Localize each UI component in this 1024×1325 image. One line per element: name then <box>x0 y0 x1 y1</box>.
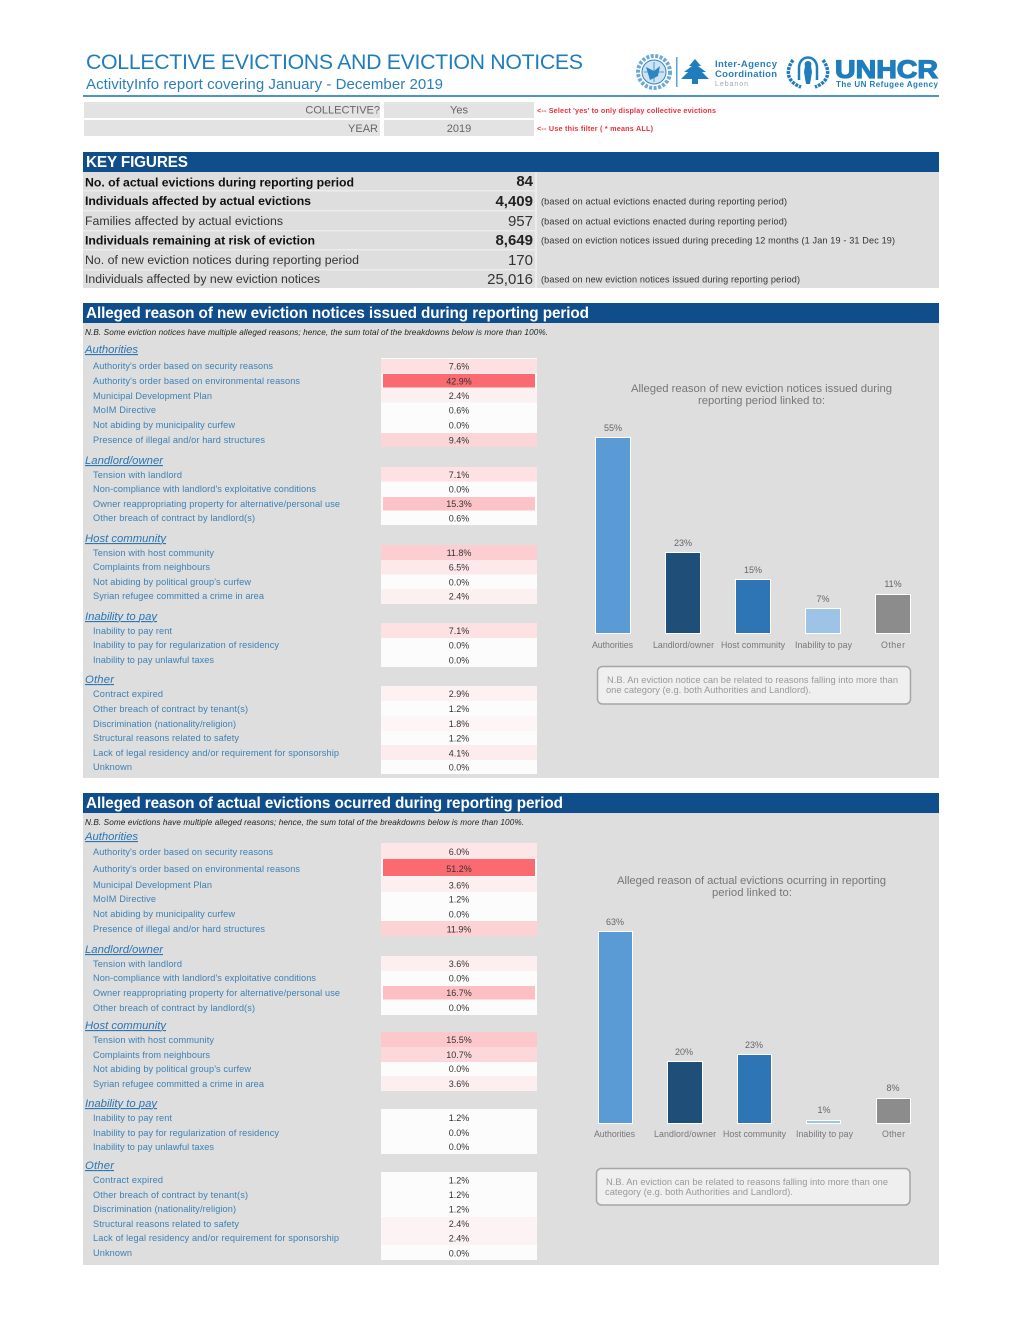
table: Host community: 0.0% <box>449 1064 469 1074</box>
section heading: Alleged reason of actual evictions ocurred during reporting period <box>86 795 563 812</box>
callout <box>596 1168 910 1205</box>
section heading: Alleged reason of new eviction notices issued during reporting period <box>86 305 589 322</box>
filters: 2019 <box>447 123 471 135</box>
table: Landlord/owner: Other breach of contract by landlord(s) <box>93 513 255 523</box>
filters: YEAR <box>348 123 378 135</box>
table: Landlord/owner: 7.1% <box>449 470 469 480</box>
table: Authorities: 11.9% <box>447 924 471 934</box>
table: Host community: Syrian refugee committed a crime in area <box>93 1079 265 1089</box>
table: Other: Structural reasons related to safety <box>93 1219 239 1229</box>
bar chart: new eviction notices: Authorities <box>592 640 634 650</box>
table: Inability to pay: 0.0% <box>449 1142 469 1152</box>
key figure: new notices: No. of new eviction notices during reporting period <box>85 253 359 267</box>
table: Other: 1.2% <box>449 1176 469 1186</box>
table: Authorities: MoIM Directive <box>93 894 156 904</box>
chart title <box>631 383 892 407</box>
table: Authorities: Presence of illegal and/or hard structures <box>93 435 265 445</box>
table: Inability to pay: Inability to pay rent <box>93 1113 172 1123</box>
table: Other: 4.1% <box>449 748 469 758</box>
table: Other: 2.4% <box>449 1234 469 1244</box>
table: Other: 1.8% <box>449 719 469 729</box>
heading: Inability to pay: Inability to pay <box>85 1098 158 1110</box>
bar chart: actual evictions: Inability to pay <box>796 1129 854 1139</box>
key figures heading <box>83 152 939 172</box>
table: Landlord/owner: Owner reappropriating property for alternative/personal use <box>93 499 340 509</box>
table: Other: Lack of legal residency and/or requirement for sponsorship <box>93 748 339 758</box>
bar chart: actual evictions: 23% <box>745 1040 763 1050</box>
callout: category (e.g. both Authorities and Landlord). <box>605 1187 793 1197</box>
table: Host community: Not abiding by political group's curfew <box>93 577 251 587</box>
bar chart: actual evictions: 20% <box>675 1047 693 1057</box>
bar chart: new eviction notices: 7% <box>816 594 830 604</box>
table: Authorities: Municipal Development Plan <box>93 391 212 401</box>
table: Inability to pay: Inability to pay for regularization of residency <box>93 1128 279 1138</box>
section heading <box>83 303 939 323</box>
bar chart: actual evictions: Other <box>882 1129 905 1139</box>
key figure: individuals affected: (based on actual evictions enacted during reporting period) <box>541 196 787 206</box>
subtitle: ActivityInfo report covering January - December 2019 <box>86 76 443 93</box>
chart title: period linked to: <box>712 887 792 899</box>
table: Landlord/owner <box>93 467 537 525</box>
heading: Landlord/owner: Landlord/owner <box>85 455 164 467</box>
table: Landlord/owner: Non-compliance with landlord's exploitative conditions <box>93 484 316 494</box>
heading: Landlord/owner: Landlord/owner <box>85 944 164 956</box>
table: Inability to pay: 0.0% <box>449 640 469 650</box>
table: Inability to pay: Inability to pay rent <box>93 626 172 636</box>
bar chart: new eviction notices <box>592 423 910 650</box>
table: Host community: 11.8% <box>447 548 471 558</box>
chart title <box>617 875 886 899</box>
note: N.B. Some evictions have multiple alleged reasons; hence, the sum total of the breakdowns below is more than 100%. <box>85 818 524 827</box>
table: Authorities: Municipal Development Plan <box>93 880 212 890</box>
table: Other: Other breach of contract by tenant(s) <box>93 1190 248 1200</box>
callout: N.B. An eviction can be related to reasons falling into more than one <box>606 1177 888 1187</box>
callout <box>598 666 910 704</box>
key figure row dividers <box>83 172 537 288</box>
bar chart: actual evictions: Authorities <box>594 1129 636 1139</box>
table: Authorities: 42.9% <box>446 376 472 386</box>
table: Host community: 0.0% <box>449 578 469 588</box>
bar chart: new eviction notices: Inability to pay <box>795 640 853 650</box>
heading: Other: Other <box>85 674 115 686</box>
table: Authorities: Authority's order based on environmental reasons <box>93 864 300 874</box>
key figures heading: KEY FIGURES <box>86 154 188 171</box>
table: Landlord/owner <box>93 956 537 1015</box>
table: Other: 1.2% <box>449 704 469 714</box>
key figure: actual evictions <box>85 173 534 190</box>
table: Inability to pay <box>93 623 537 667</box>
table: Other: Contract expired <box>93 689 163 699</box>
table: Landlord/owner: Other breach of contract by landlord(s) <box>93 1003 255 1013</box>
table: Other: 0.0% <box>449 1248 469 1258</box>
chart title: reporting period linked to: <box>698 395 825 407</box>
table: Authorities: 6.0% <box>449 847 469 857</box>
filters: Yes <box>450 104 468 116</box>
key figure: individuals affected: 4,409 <box>495 193 533 210</box>
key figure: remaining at risk: Individuals remaining at risk of eviction <box>85 234 315 248</box>
table: Authorities: 0.0% <box>449 910 469 920</box>
logo divider <box>676 57 678 87</box>
key figure: families affected <box>85 213 787 230</box>
table: Host community <box>93 545 537 604</box>
key figure: families affected: Families affected by actual evictions <box>85 214 283 228</box>
table: Host community: Complaints from neighbours <box>93 562 210 572</box>
bar chart: new eviction notices: Other <box>881 640 905 650</box>
table: Other: 1.2% <box>449 734 469 744</box>
heading: Authorities: Authorities <box>84 344 138 356</box>
key figure: new notices <box>85 252 533 269</box>
logo: Inter-Agency Coordination Lebanon: Coordination <box>715 69 777 80</box>
heading: Host community: Host community <box>85 1020 167 1032</box>
table: Landlord/owner: 0.6% <box>449 514 469 524</box>
note: N.B. Some eviction notices have multiple alleged reasons; hence, the sum total of the breakdowns below is more than 100%. <box>85 328 548 337</box>
key figure: individuals affected by notices: Individuals affected by new eviction notices <box>85 272 320 286</box>
table: Host community: Syrian refugee committed a crime in area <box>93 591 265 601</box>
key figure: individuals affected: Individuals affected by actual evictions <box>85 194 311 208</box>
table: Inability to pay: 0.0% <box>449 656 469 666</box>
table: Authorities: Presence of illegal and/or hard structures <box>93 924 265 934</box>
table: Landlord/owner: Tension with landlord <box>93 959 182 969</box>
table: Inability to pay <box>93 1109 537 1154</box>
key figure: actual evictions: No. of actual evictions during reporting period <box>85 176 354 190</box>
logo: Inter-Agency Coordination Lebanon <box>715 59 778 88</box>
filters: <-- Use this filter ( * means ALL) <box>537 124 654 133</box>
chart title: Alleged reason of new eviction notices issued during <box>631 383 892 395</box>
title: COLLECTIVE EVICTIONS AND EVICTION NOTICES <box>86 50 583 74</box>
table: Authorities <box>93 358 537 447</box>
bar chart: new eviction notices: 15% <box>744 565 762 575</box>
key figure: individuals affected by notices: 25,016 <box>487 271 533 288</box>
key figure: individuals affected by notices <box>85 271 800 288</box>
logo: Inter-Agency Coordination Lebanon: Inter-Agency <box>715 59 778 70</box>
table: Authorities: 3.6% <box>449 880 469 890</box>
table: Authorities <box>93 843 537 936</box>
table: Landlord/owner: 16.7% <box>446 988 472 998</box>
table: Landlord/owner: 0.0% <box>449 484 469 494</box>
table: Host community: Tension with host community <box>93 548 214 558</box>
table: Host community: 10.7% <box>446 1050 472 1060</box>
table: Inability to pay: Inability to pay for regularization of residency <box>93 640 279 650</box>
table: Other: 0.0% <box>449 762 469 772</box>
bar chart: new eviction notices: Landlord/owner <box>653 640 714 650</box>
callout: N.B. An eviction notice can be related to reasons falling into more than <box>607 675 898 685</box>
table: Other: 1.2% <box>449 1204 469 1214</box>
logo: cedar <box>681 59 709 84</box>
bar chart: actual evictions: 63% <box>606 917 624 927</box>
table: Host community <box>93 1032 537 1091</box>
panel: new eviction notices <box>83 303 939 778</box>
bar chart: new eviction notices: Host community <box>721 640 786 650</box>
table: Authorities: 51.2% <box>446 864 472 874</box>
chart title: Alleged reason of actual evictions ocurring in reporting <box>617 875 886 887</box>
table: Authorities: 9.4% <box>449 436 469 446</box>
table: Other: Discrimination (nationality/religion) <box>93 1204 236 1214</box>
table: Other: 2.9% <box>449 689 469 699</box>
table: Landlord/owner: Tension with landlord <box>93 470 182 480</box>
bar chart: new eviction notices: 11% <box>884 579 902 589</box>
table: Landlord/owner: 15.3% <box>446 499 472 509</box>
table: Authorities: Authority's order based on security reasons <box>93 361 273 371</box>
key figure: new notices: 170 <box>508 252 533 269</box>
table: Landlord/owner: Owner reappropriating property for alternative/personal use <box>93 988 340 998</box>
key figure: individuals affected by notices: (based on new eviction notices issued during reporting period) <box>541 274 800 284</box>
heading: Authorities: Authorities <box>84 831 138 843</box>
table: Authorities: Not abiding by municipality curfew <box>93 909 235 919</box>
key figure: individuals affected <box>85 193 787 210</box>
table: Host community: Not abiding by political group's curfew <box>93 1064 251 1074</box>
key figure: remaining at risk: 8,649 <box>495 232 533 249</box>
key figure: families affected: 957 <box>508 213 533 230</box>
key figure: remaining at risk <box>85 232 895 249</box>
filters: <-- Select 'yes' to only display collective evictions <box>537 106 716 115</box>
table: Authorities: 7.6% <box>449 362 469 372</box>
section heading <box>83 793 939 813</box>
table: Inability to pay: 7.1% <box>449 626 469 636</box>
table: Other: Lack of legal residency and/or requirement for sponsorship <box>93 1233 339 1243</box>
table: Inability to pay: 0.0% <box>449 1128 469 1138</box>
logo: UN emblem <box>638 56 670 88</box>
callout: one category (e.g. both Authorities and Landlord). <box>606 685 811 695</box>
table: Host community: Tension with host community <box>93 1035 214 1045</box>
table: Landlord/owner: 0.0% <box>449 974 469 984</box>
table: Host community: 2.4% <box>449 592 469 602</box>
table: Authorities: Not abiding by municipality curfew <box>93 420 235 430</box>
key figure: remaining at risk: (based on eviction notices issued during preceding 12 months (1 Jan 19 - 31 Dec 19) <box>541 236 895 246</box>
bar chart: new eviction notices: 55% <box>604 423 622 433</box>
bar chart: actual evictions: 1% <box>817 1105 831 1115</box>
table: Authorities: 1.2% <box>449 894 469 904</box>
table: Host community: 3.6% <box>449 1079 469 1089</box>
title rule <box>83 95 939 97</box>
heading: Other: Other <box>85 1160 115 1172</box>
table: Host community: Complaints from neighbours <box>93 1050 210 1060</box>
table: Authorities: 0.6% <box>449 406 469 416</box>
bar chart: actual evictions: Landlord/owner <box>654 1129 716 1139</box>
table: Other <box>93 1172 537 1260</box>
logo: UNHCR wordmark: UNHCR <box>835 56 938 84</box>
table: Landlord/owner: 0.0% <box>449 1003 469 1013</box>
table: Authorities: MoIM Directive <box>93 405 156 415</box>
heading: Host community: Host community <box>85 533 167 545</box>
table: Authorities: 0.0% <box>449 420 469 430</box>
table: Other: Structural reasons related to safety <box>93 733 239 743</box>
bar chart: actual evictions <box>594 917 910 1139</box>
table: Inability to pay: Inability to pay unlawful taxes <box>93 655 214 665</box>
table: Other: Contract expired <box>93 1175 163 1185</box>
table: Inability to pay: Inability to pay unlawful taxes <box>93 1142 214 1152</box>
table: Authorities: Authority's order based on environmental reasons <box>93 376 300 386</box>
table: Landlord/owner: 3.6% <box>449 959 469 969</box>
table: Authorities: Authority's order based on security reasons <box>93 847 273 857</box>
logo: UNHCR wordmark: The UN Refugee Agency <box>836 80 939 89</box>
table: Authorities: 2.4% <box>449 391 469 401</box>
table: Host community: 15.5% <box>446 1035 472 1045</box>
table: Host community: 6.5% <box>449 562 469 572</box>
key figure: families affected: (based on actual evictions enacted during reporting period) <box>541 216 787 226</box>
table: Other: Unknown <box>93 762 132 772</box>
filters: COLLECTIVE? <box>305 104 380 116</box>
panel: actual evictions <box>83 793 939 1265</box>
logo: UNHCR laurel emblem <box>788 58 828 87</box>
filters <box>84 102 716 136</box>
key figure: actual evictions: 84 <box>516 173 534 190</box>
bar chart: new eviction notices: 23% <box>674 538 692 548</box>
table: Other: 1.2% <box>449 1190 469 1200</box>
table: Landlord/owner: Non-compliance with landlord's exploitative conditions <box>93 973 316 983</box>
bar chart: actual evictions: Host community <box>723 1129 787 1139</box>
table: Inability to pay: 1.2% <box>449 1113 469 1123</box>
table: Other: 2.4% <box>449 1219 469 1229</box>
table: Other <box>93 686 537 774</box>
logo: Inter-Agency Coordination Lebanon: Lebanon <box>715 81 748 88</box>
table: Other: Unknown <box>93 1248 132 1258</box>
bar chart: actual evictions: 8% <box>886 1083 900 1093</box>
table: Other: Other breach of contract by tenant(s) <box>93 704 248 714</box>
heading: Inability to pay: Inability to pay <box>85 611 158 623</box>
panel: key figures <box>83 152 939 288</box>
table: Other: Discrimination (nationality/religion) <box>93 719 236 729</box>
